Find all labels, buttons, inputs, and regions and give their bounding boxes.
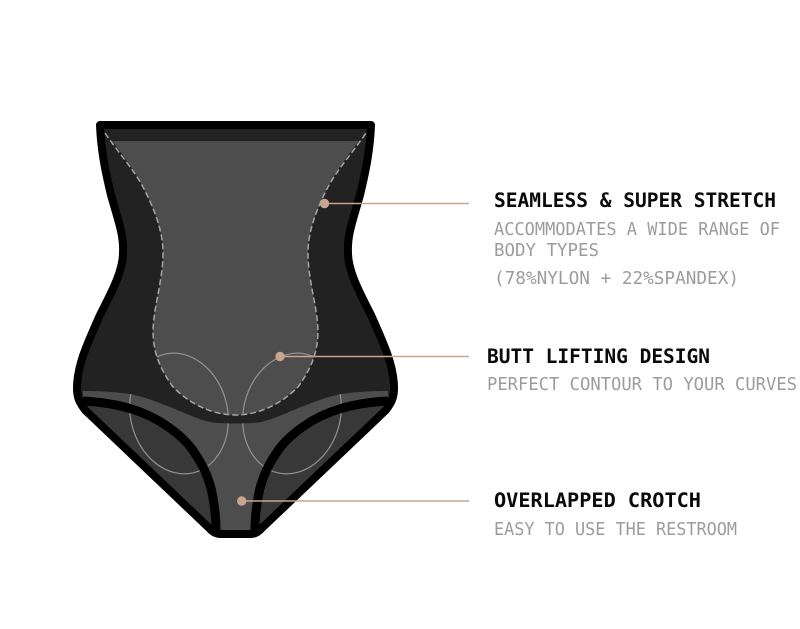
text block: seamless and super stretch: ACCOMMODATES A WIDE RANGE OF: [494, 219, 780, 240]
text block: butt lifting design: [487, 345, 797, 395]
garment outline: [77, 125, 394, 534]
text block: overlapped crotch: EASY TO USE THE RESTROOM: [494, 519, 737, 540]
leg panels: [83, 401, 388, 530]
text block: overlapped crotch: OVERLAPPED CROTCH: [494, 489, 701, 512]
front panel: [83, 391, 388, 531]
garment illustration: [77, 125, 394, 534]
butt lift ellipses: [129, 352, 342, 474]
stitching dashes: [105, 133, 366, 415]
center mesh panel: [112, 141, 359, 415]
text block: seamless and super stretch: BODY TYPES: [494, 240, 599, 261]
callout line: seamless: [320, 199, 469, 208]
leg opening outlines: [83, 401, 388, 530]
text block: seamless and super stretch: SEAMLESS & SUPER STRETCH: [494, 189, 776, 212]
text block: overlapped crotch: [494, 489, 737, 540]
garment body: [77, 125, 394, 534]
text block: seamless and super stretch: [494, 189, 780, 289]
callout line: crotch: [237, 496, 469, 506]
text block: butt lifting design: BUTT LIFTING DESIGN: [487, 345, 710, 368]
text block: seamless and super stretch: (78%NYLON + 22%SPANDEX): [494, 268, 739, 289]
callout line: butt lifting: [275, 352, 469, 361]
